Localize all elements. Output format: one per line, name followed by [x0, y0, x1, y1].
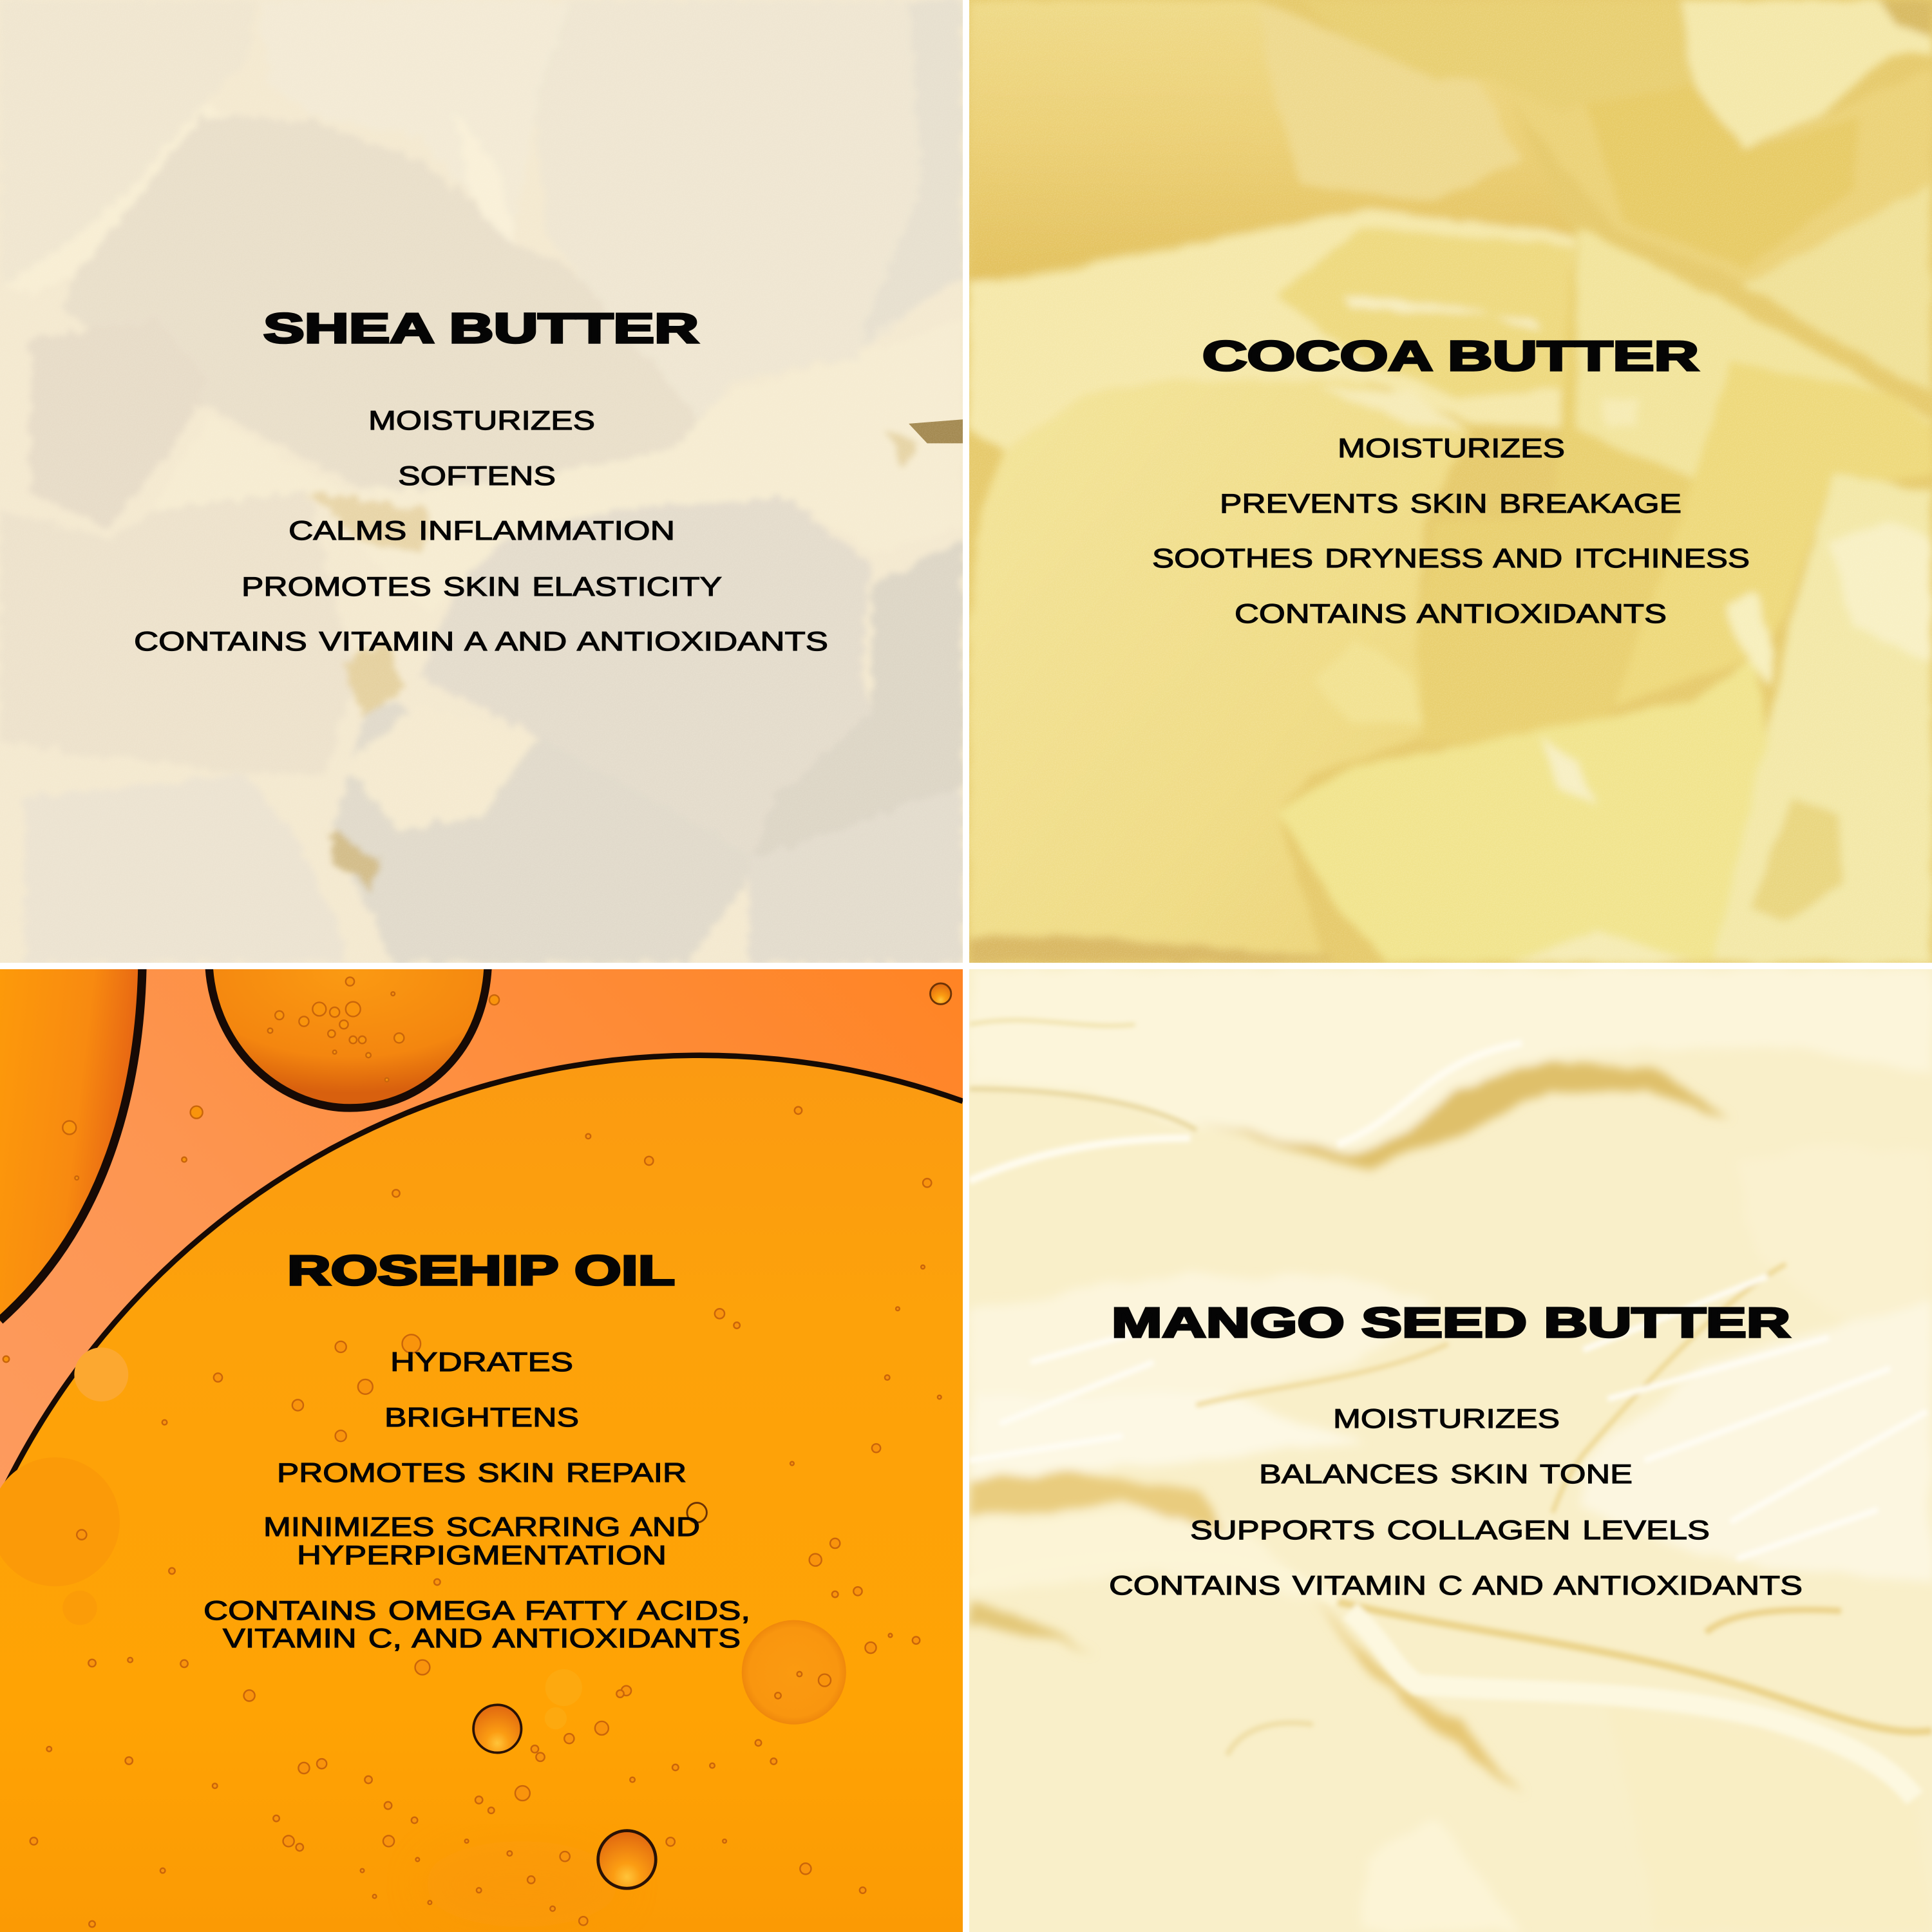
heading: shea butter: SHEA BUTTER [263, 305, 699, 352]
benefits list: cocoa butter: PREVENTS SKIN BREAKAGE [1220, 488, 1681, 518]
benefits list: shea butter [134, 405, 828, 656]
panel: rosehip oil [0, 957, 963, 1932]
benefits list: shea butter: PROMOTES SKIN ELASTICITY [242, 571, 722, 601]
benefits list: cocoa butter [1152, 433, 1750, 629]
benefits list: mango seed butter: SUPPORTS COLLAGEN LEVELS [1190, 1515, 1710, 1545]
benefits list: shea butter: MOISTURIZES [368, 405, 595, 435]
heading: rosehip oil: ROSEHIP OIL [287, 1247, 675, 1294]
benefits list: shea butter: SOFTENS [398, 460, 556, 491]
benefits list: rosehip oil: MINIMIZES SCARRING AND [263, 1511, 700, 1542]
benefits list: mango seed butter: MOISTURIZES [1333, 1403, 1560, 1434]
benefits list: mango seed butter [1109, 1403, 1803, 1600]
heading: cocoa butter: COCOA BUTTER [1202, 332, 1699, 379]
benefits list: cocoa butter: SOOTHES DRYNESS AND ITCHINESS [1152, 543, 1750, 573]
benefits list: rosehip oil: HYDRATES [390, 1347, 573, 1377]
benefits list: rosehip oil: VITAMIN C, AND ANTIOXIDANTS [223, 1623, 741, 1653]
panel: cocoa butter [969, 0, 1932, 963]
benefits list: rosehip oil: CONTAINS OMEGA FATTY ACIDS, [204, 1595, 750, 1625]
shea butter texture background [0, 0, 963, 963]
mango seed butter texture background [969, 969, 1932, 1932]
benefits list: shea butter: CONTAINS VITAMIN A AND ANTIOXIDANTS [134, 626, 828, 656]
cocoa butter texture background [969, 0, 1932, 963]
rosehip oil bubbles background [0, 957, 963, 1932]
benefits list: cocoa butter: MOISTURIZES [1338, 433, 1565, 463]
benefits list: rosehip oil: HYPERPIGMENTATION [297, 1540, 667, 1570]
benefits list: cocoa butter: CONTAINS ANTIOXIDANTS [1235, 598, 1667, 629]
benefits list: mango seed butter: CONTAINS VITAMIN C AND ANTIOXIDANTS [1109, 1570, 1803, 1600]
panel: shea butter [0, 0, 963, 963]
panel: mango seed butter [969, 969, 1932, 1932]
benefits list: rosehip oil: PROMOTES SKIN REPAIR [277, 1457, 687, 1488]
benefits list: rosehip oil: BRIGHTENS [384, 1402, 579, 1432]
benefits list: shea butter: CALMS INFLAMMATION [289, 515, 675, 545]
heading: mango seed butter: MANGO SEED BUTTER [1112, 1299, 1790, 1346]
benefits list: mango seed butter: BALANCES SKIN TONE [1259, 1459, 1633, 1489]
benefits list: rosehip oil [204, 1347, 750, 1653]
